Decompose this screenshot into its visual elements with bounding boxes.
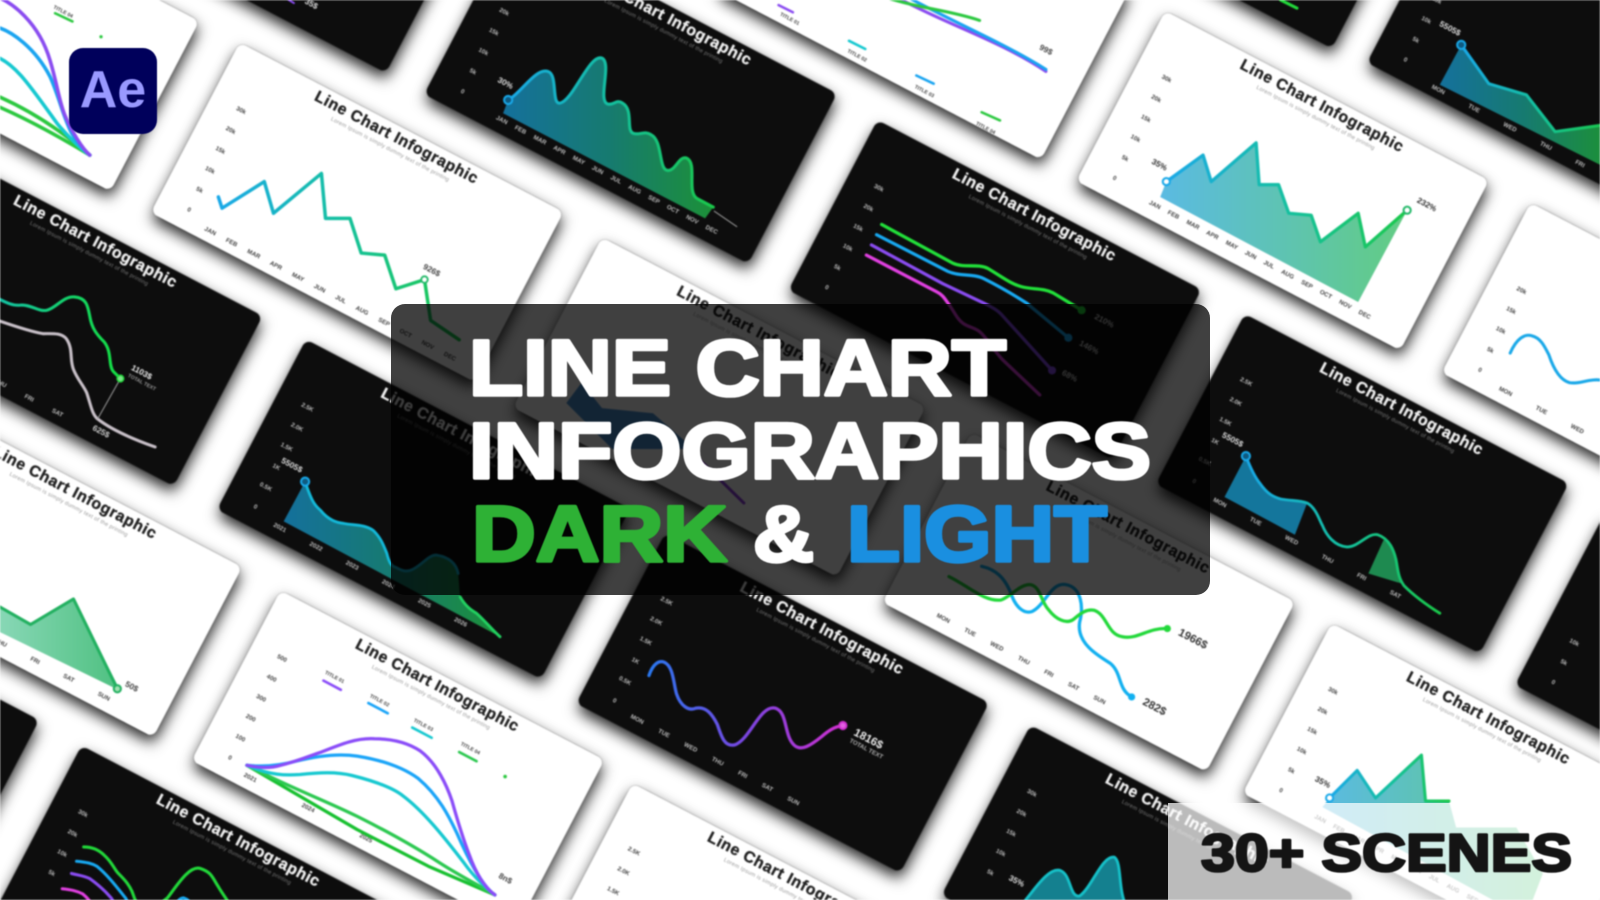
card: dark four-line center: 30k: [873, 183, 885, 194]
card: light right wave: 5k: [1486, 346, 1495, 355]
card: dark area chart top: 5k: [468, 67, 478, 77]
card: dark area chart far top right: 5k: [1411, 36, 1421, 45]
chart: light two waves: 1966$: [1176, 627, 1210, 652]
card: light area chart top right: [1076, 11, 1489, 350]
card: dark wave chart bottom: 2.0K: [649, 615, 664, 628]
card: dark area chart top: JAN FEB MAR APR MAY JUN JUL AUG SEP OCT NOV DEC: [495, 114, 719, 236]
card: dark area right: 2.5K: [1239, 376, 1254, 388]
chart: left dark two lines: [0, 297, 158, 447]
chart: top legend lines: TITLE 02: [846, 48, 868, 64]
chart: top legend lines: TITLE 04: [975, 121, 996, 136]
card: dark area center-left: 1K: [271, 462, 282, 472]
card: dark area center-left: 2.0K: [290, 421, 305, 434]
card: dark area right: [1156, 314, 1569, 653]
chart: dark four lines: 146%: [1078, 339, 1101, 357]
card: dark four-line center: 20k: [862, 203, 875, 214]
title line: LINE CHART: LINE CHART: [469, 323, 1006, 412]
card: dark multi-line bottom-left: 30k: [77, 808, 89, 819]
card: dark area right: 1K: [1210, 437, 1220, 447]
card: light zigzag line chart: 30k: [235, 105, 248, 116]
chart: zigzag line: [218, 173, 459, 340]
card: top light legend chart: [717, 0, 1130, 159]
card: dark area right: MON TUE WED THU FRI SAT: [1212, 497, 1402, 601]
card: dark multi-line bottom-left: 10k: [56, 848, 69, 859]
title line: DARK & LIGHT: LIGHT: [847, 489, 1107, 578]
card: dark area right: 1.5K: [1218, 416, 1233, 428]
card: light zigzag line chart: Lorem Ipsum is simply dummy text of the printing: [330, 116, 450, 183]
card: dark four-line center: 15k: [852, 223, 865, 234]
title line: DARK & LIGHT: [472, 489, 1107, 578]
card: light area chart top right: JAN FEB MAR APR MAY JUN JUL AUG SEP OCT NOV DEC: [1148, 199, 1372, 321]
chart: far top right area: [1438, 19, 1600, 168]
card: light area chart top right: Lorem Ipsum is simply dummy text of the printing: [1255, 85, 1375, 152]
card: light center behind title: [513, 238, 926, 577]
card: light area chart top right: 20k: [1150, 93, 1163, 105]
card: light multi-curve chart: 200: [244, 713, 257, 724]
card: light two-wave chart: MON TUE WED THU FRI SAT SUN: [935, 612, 1107, 706]
chart: bottom dark area: 35%: [1007, 873, 1027, 889]
card: dark wave chart bottom: Line Chart Infographic: [737, 579, 906, 678]
card: light right wave: [1442, 203, 1600, 542]
card: light zigzag line chart: 15k: [214, 145, 227, 156]
card: light bottom center: 2.0K: [616, 865, 631, 878]
icon: After Effects logo: Ae: [80, 61, 146, 119]
card: light multi-curve chart: 100: [234, 733, 247, 744]
chart: bottom-left dark multi-lines: [62, 847, 233, 900]
chart: light area top right: 232%: [1415, 196, 1439, 214]
card: light zigzag line chart: 5k: [195, 186, 205, 195]
card: light zigzag line chart: 10k: [204, 165, 216, 176]
card: light area chart top right: 0: [1111, 175, 1118, 183]
chart: light multi-curve bell: 8n$: [497, 871, 514, 886]
card: light bottom center: 2.5K: [626, 845, 642, 858]
chart: dark four lines: 68%: [1060, 368, 1080, 384]
card: light zigzag line chart: [151, 43, 563, 382]
card: dark wave chart bottom: Lorem Ipsum is simply dummy text of the printing: [755, 607, 875, 674]
card: light multi-curve chart: 0: [227, 754, 233, 762]
card: dark four-line center: [789, 120, 1201, 459]
card: dark two-line left: [0, 147, 262, 486]
card: dark area chart top: Lorem Ipsum is simply dummy text of the printing: [603, 0, 723, 65]
card: light right wave: 15k: [1505, 305, 1518, 316]
card: light multi-curve chart: 500: [276, 653, 288, 664]
chart: dark area with peaks: [496, 58, 737, 227]
card: dark multi-line bottom-left: 5k: [47, 869, 57, 878]
card: dark bottom area: [942, 725, 1354, 900]
chart: light multi-curve bell: TITLE 04: [459, 741, 481, 757]
chart: dark four lines: [866, 224, 1116, 395]
card: light right wave: 20k: [1515, 285, 1528, 297]
card: light multi-curve chart: Lorem Ipsum is simply dummy text of the printing: [370, 664, 491, 731]
chart: top legend lines: [779, 0, 1054, 136]
card: dark four-line center: Lorem Ipsum is simply dummy text of the printing: [967, 194, 1088, 261]
chart: right wave: [1510, 335, 1600, 383]
card: dark area right: Line Chart Infographic: [1317, 360, 1486, 459]
card: dark far right: 0: [1550, 679, 1557, 687]
card: dark area center-left: [217, 340, 630, 679]
card: dark area center-left: 1.5K: [279, 441, 294, 454]
card: light bottom right area: 10k: [1295, 746, 1308, 757]
card: dark area center-left: 2.5K: [300, 402, 315, 414]
card: light center behind title: Line Chart Infographic: [674, 283, 843, 382]
card: dark wave chart bottom: 1K: [630, 656, 641, 666]
card: dark wave chart bottom: 1.5K: [638, 635, 654, 648]
chart: bottom right light area: [1313, 755, 1543, 900]
card: dark four-line center: Line Chart Infographic: [949, 166, 1118, 265]
card: dark far right: 5k: [1559, 658, 1569, 668]
chart: center-left dark area: [280, 456, 500, 637]
callout: 30+ scenes: 30+ SCENES: [1201, 824, 1572, 883]
chart: far top right area: 5505$: [1438, 19, 1463, 38]
card: light bottom right area: [1243, 623, 1600, 900]
card: light multi-curve chart: 400: [265, 673, 278, 684]
card: dark bottom area: 5k: [986, 868, 995, 878]
chart: left dark two lines: 625$: [91, 423, 112, 440]
card: light zigzag line chart: JAN FEB MAR APR MAY JUN JUL AUG SEP OCT NOV DEC: [203, 226, 458, 363]
card: dark wave chart bottom: [576, 533, 989, 873]
chart: light multi-curve bell: [247, 670, 514, 895]
card: dark bottom-left corner: [0, 551, 39, 890]
card: dark area center-left: 2021 2022 2023 2024 2025 2026: [272, 522, 469, 629]
chart: center light area under panel: [566, 383, 744, 503]
card: dark area center-left: Lorem Ipsum is simply dummy text of the printing: [396, 413, 516, 480]
card: dark area center-left: Line Chart Infographic: [378, 385, 547, 484]
card: light area chart top right: 10k: [1129, 133, 1142, 144]
card: dark area right: 0.5K: [1197, 456, 1212, 468]
card: light area chart top right: 15k: [1140, 113, 1152, 125]
card: dark area right: 2.0K: [1228, 396, 1244, 408]
card: light multi-curve chart: Line Chart Infographic: [352, 636, 522, 735]
chart: light multi-curve bell: TITLE 03: [412, 718, 434, 733]
card: dark area chart top: 0: [459, 88, 466, 96]
card: dark four-line center: 10k: [841, 242, 854, 254]
chart: light two waves: [949, 566, 1210, 719]
card: light zigzag line chart: Line Chart Infographic: [312, 88, 481, 187]
chart: top-left converging curves: TITLE 04: [52, 5, 74, 20]
card: dark bottom area: Lorem Ipsum is simply dummy text of the printing: [1120, 799, 1241, 866]
title line: DARK & LIGHT: &: [753, 489, 814, 578]
chart: dark gradient wave: 1816$: [852, 727, 886, 752]
card: dark four-line center: 0: [824, 284, 830, 292]
card: dark far right: [1515, 515, 1600, 854]
chart: light multi-curve bell: TITLE 02: [368, 693, 390, 709]
chart: right dark area: [1221, 431, 1440, 613]
card: dark bottom area: 15k: [1005, 828, 1018, 839]
card: dark area chart top: 10k: [477, 47, 490, 58]
card: dark area center-left: 0.5K: [258, 481, 274, 494]
card: dark wave chart bottom: MON TUE WED THU FRI SAT SUN: [629, 713, 800, 807]
card: light bottom right area: 15k: [1306, 726, 1319, 737]
card: dark bottom area: 10k: [994, 848, 1007, 859]
card: light area left: Lorem Ipsum is simply dummy text of the printing: [8, 472, 128, 538]
card: dark two-line left: Line Chart Infographic: [11, 192, 180, 292]
card: light multi-curve chart: 2021 2024 2025: [242, 772, 374, 845]
card: light bottom center: [544, 783, 956, 900]
card: light zigzag line chart: 0: [186, 206, 193, 214]
chart: right dark area: 5505$: [1221, 431, 1245, 449]
card: dark two-line left: Lorem Ipsum is simply dummy text of the printing: [29, 221, 149, 287]
card: top dark small: [1008, 0, 1421, 48]
card: light bottom right area: 30k: [1327, 686, 1339, 697]
chart: center-left dark area: 5505$: [280, 456, 304, 475]
card: light bottom center: 1.5K: [606, 885, 621, 898]
chart: dark four lines: 210%: [1093, 312, 1116, 330]
card: light area left: [0, 398, 242, 737]
title line: DARK & LIGHT: DARK: [472, 489, 727, 578]
card: light bottom right area: 20k: [1316, 706, 1329, 717]
card: top dark: [62, 0, 475, 73]
card: light two-wave chart: Line Chart Infographic: [1043, 478, 1212, 577]
card: light two-wave chart: [882, 432, 1295, 772]
card: top-left light multi-line: [0, 0, 199, 191]
chart: dark area with peaks: 30%: [496, 75, 515, 91]
card: dark multi-line bottom-left: Line Chart Infographic: [154, 791, 323, 890]
chart: left dark two lines: 1103$: [130, 363, 154, 382]
card: dark area right: 0: [1191, 478, 1198, 486]
chart: top legend lines: 99$: [1038, 43, 1054, 57]
card: light two-wave chart: Lorem Ipsum is simply dummy text of the printing: [1061, 506, 1182, 573]
card: dark area chart top: 15k: [488, 27, 500, 38]
label: top dark card value: [286, 0, 320, 11]
chart: top legend lines: TITLE 03: [913, 84, 935, 99]
card: light multi-curve chart: [192, 591, 604, 900]
chart: top legend lines: TITLE 01: [779, 12, 800, 27]
icon: After Effects logo: [69, 48, 157, 134]
card: dark bottom area: 30k: [1026, 788, 1038, 799]
card: dark bottom area: 20k: [1015, 808, 1028, 819]
card: dark wave chart bottom: 2.5K: [659, 595, 674, 608]
card: light multi-curve chart: 300: [255, 693, 268, 704]
card: light center behind title: Lorem Ipsum is simply dummy text of the printing: [692, 311, 812, 378]
chart: top-left converging curves: [0, 0, 103, 155]
card: dark area chart far top right: [1367, 0, 1600, 232]
card: dark four-line center: 5k: [833, 263, 842, 273]
card: light bottom right area: Lorem Ipsum is simply dummy text of the printing: [1421, 697, 1542, 764]
card: light bottom right area: Line Chart Infographic: [1404, 669, 1573, 768]
chart: bottom dark area: [1007, 857, 1128, 900]
card: dark far right: 10k: [1568, 637, 1581, 649]
callout: 30+ scenes: [1168, 803, 1600, 900]
card: dark wave chart bottom: 0: [611, 697, 618, 705]
card: light area chart top right: 5k: [1120, 154, 1130, 164]
chart: left light area: [0, 599, 140, 694]
chart: zigzag line: 926$: [422, 262, 442, 279]
chart: light multi-curve bell: TITLE 01: [324, 670, 345, 685]
card: dark multi-line bottom-left: 20k: [66, 828, 79, 839]
chart: light area top right: [1150, 143, 1439, 302]
chart: light area top right: 35%: [1150, 157, 1169, 173]
card: light area chart top right: Line Chart Infographic: [1237, 56, 1406, 156]
card: dark bottom area: Line Chart Infographic: [1102, 771, 1272, 870]
card: dark area right: Lorem Ipsum is simply dummy text of the printing: [1335, 388, 1455, 455]
card: light bottom right area: 5k: [1287, 766, 1296, 776]
card: dark area center-left: 0: [252, 503, 259, 511]
card: dark multi-line bottom-left: [0, 746, 405, 900]
card: light zigzag line chart: 20k: [224, 125, 237, 136]
title line: INFOGRAPHICS: INFOGRAPHICS: [469, 406, 1151, 495]
card: dark area chart top: 20k: [498, 7, 511, 18]
card: dark multi-line bottom-left: Lorem Ipsum is simply dummy text of the printing: [171, 820, 292, 886]
card: light bottom right area: 0: [1278, 787, 1284, 795]
chart: light two waves: 282$: [1140, 696, 1169, 719]
chart: bottom right light area: 35%: [1313, 774, 1333, 790]
title panel: [391, 304, 1210, 595]
card: dark wave chart bottom: 0.5K: [618, 675, 633, 687]
chart: dark gradient wave: TOTAL TEXT: [848, 737, 884, 761]
chart: dark gradient wave: [649, 662, 886, 761]
card: dark area chart top: [424, 0, 837, 264]
card: dark area chart far top right: 10k: [1420, 15, 1433, 26]
card: light right wave: 10k: [1494, 325, 1507, 336]
card: light right wave: 0: [1477, 366, 1483, 375]
chart: small green line on top dark card: [1281, 0, 1297, 8]
chart: left dark two lines: TOTAL TEXT: [127, 373, 158, 393]
chart: left light area: 50$: [124, 680, 140, 694]
card: dark area chart far top right: 0: [1402, 56, 1409, 64]
card: light area chart top right: 30k: [1160, 74, 1173, 85]
